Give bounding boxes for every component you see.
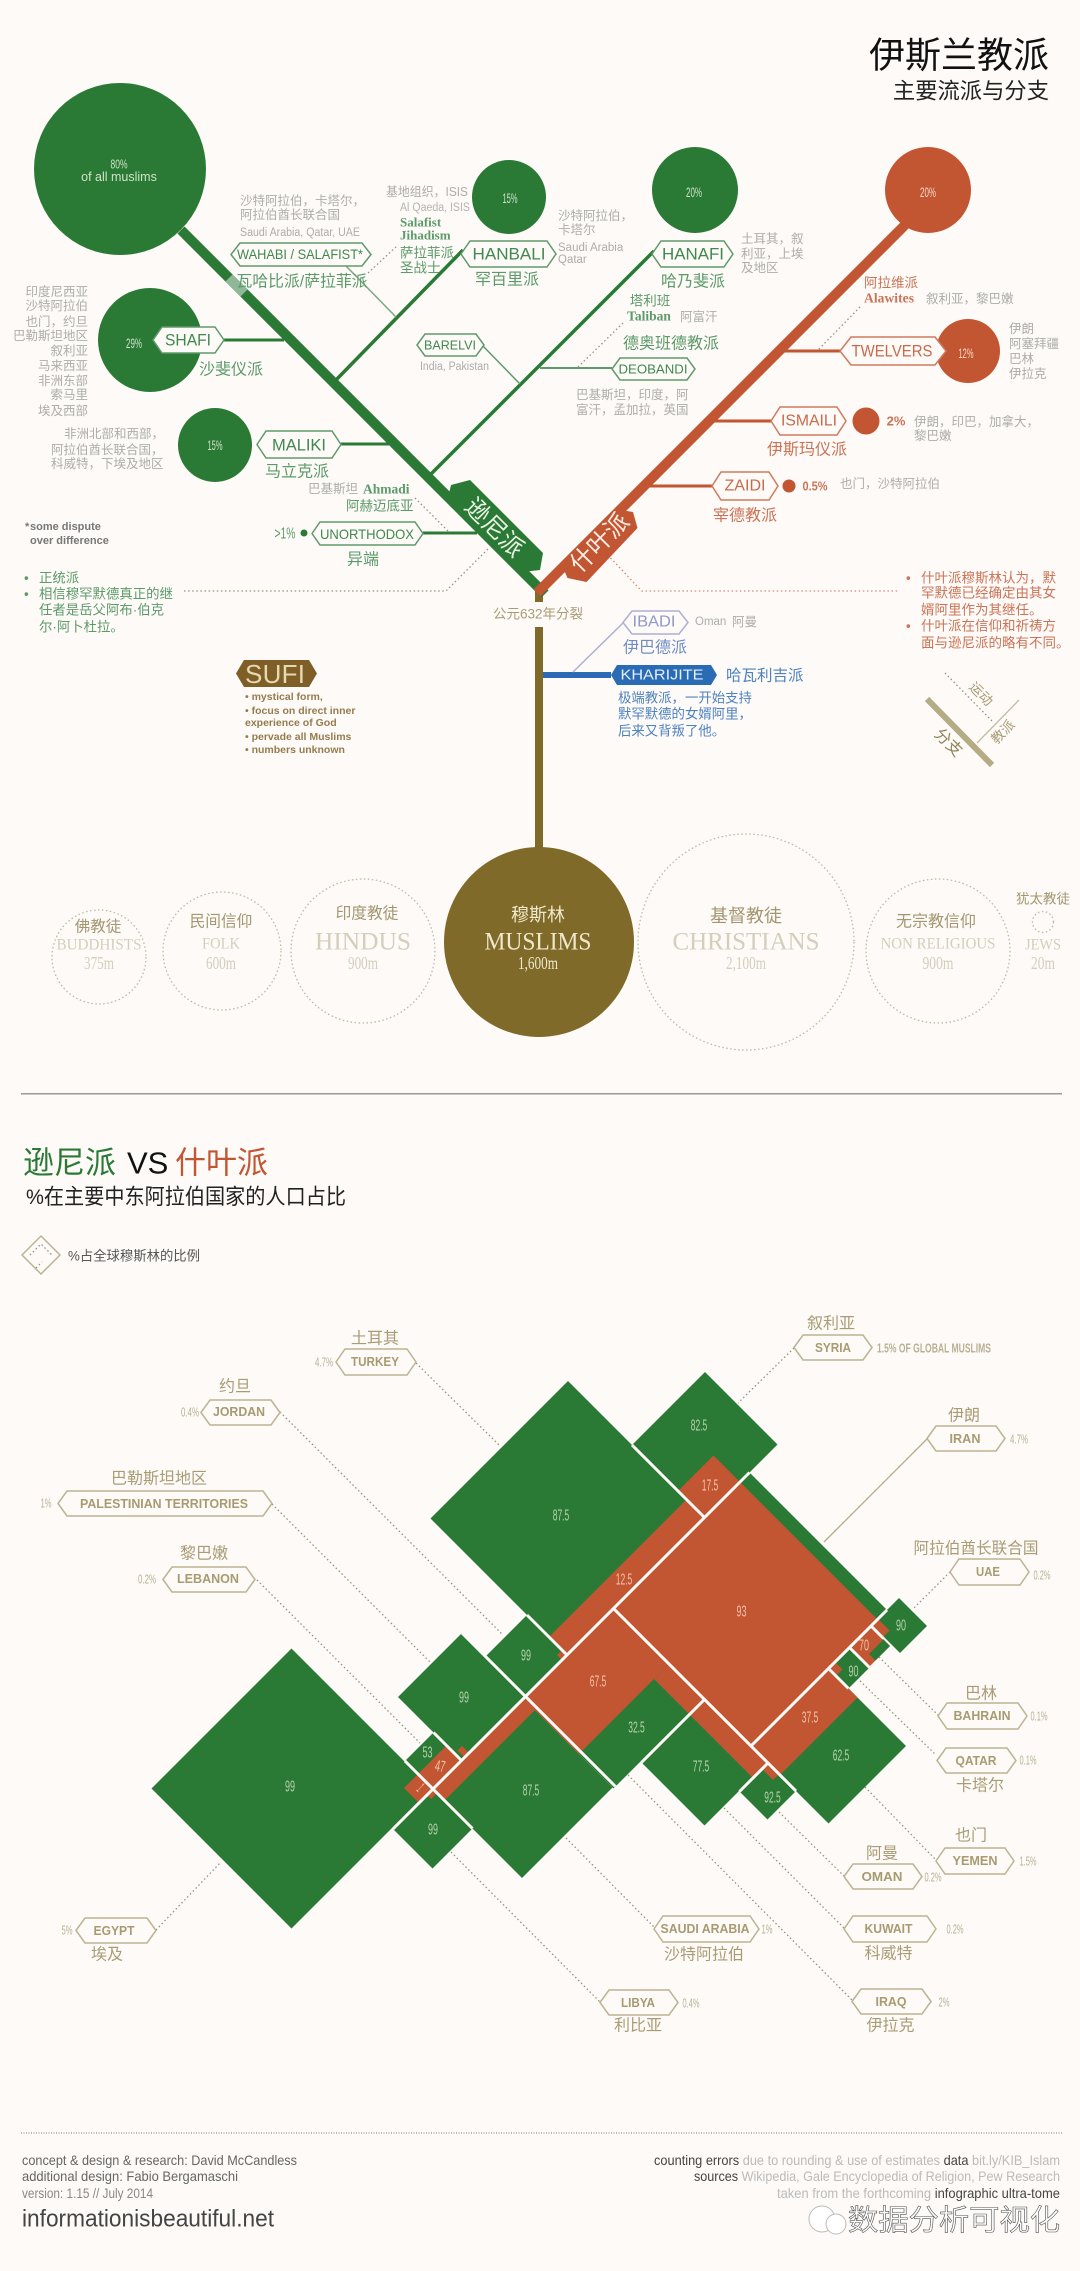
- branch: Taliban and Deobandi: 巴基斯坦，印度，阿: [576, 387, 689, 402]
- branch: Ismaili: ISMAILI: [781, 412, 837, 430]
- diamond: Libya: [393, 1789, 472, 1868]
- footer: credits: additional design: Fabio Bergamaschi: [22, 2168, 238, 2184]
- branch: Barelvi: BARELVI: [424, 338, 476, 352]
- country label: Iraq: IRAQ: [876, 1995, 907, 2009]
- branch: Hanafi: 哈乃斐派: [661, 272, 725, 290]
- branch: Twelvers: 巴林: [1009, 352, 1034, 366]
- branch: Kharijite: KHARIJITE: [620, 666, 704, 684]
- country label: Libya: 利比亚: [614, 2016, 662, 2034]
- religion circle: Buddhists: [52, 910, 146, 1004]
- footer: credits: informationisbeautiful.net: [22, 2206, 274, 2232]
- country label: Turkey: [315, 1330, 416, 1375]
- religion circle: Jews: [1016, 892, 1070, 973]
- country label: Qatar: 卡塔尔: [956, 1776, 1004, 1794]
- chart values: 1: [413, 1781, 427, 1795]
- religion circle: Hindus: 900m: [348, 953, 378, 973]
- country label: Turkey: 土耳其: [351, 1330, 399, 1348]
- legend: share of global Muslims: [22, 1236, 200, 1274]
- chart values: 90: [896, 1618, 906, 1634]
- religion circle: Jews: 20m: [1031, 953, 1055, 973]
- text block: Sunni beliefs: 相信穆罕默德真正的继: [39, 586, 173, 602]
- panel: Sufi: • numbers unknown: [245, 744, 345, 756]
- country label: Iraq: 2%: [938, 1994, 950, 2010]
- religion circle: Non religious: [866, 879, 1010, 1023]
- chart values: 12.5: [616, 1572, 632, 1588]
- branch: Hanafi: [652, 147, 804, 290]
- diamond: Iraq: [524, 1608, 704, 1788]
- branch: Taliban and Deobandi: 富汗，孟加拉，英国: [576, 402, 689, 417]
- country label: Oman: 阿曼: [866, 1844, 898, 1862]
- footer: sources: [654, 2152, 1060, 2201]
- branch: Unorthodox and Ahmadi: >1%: [274, 526, 296, 542]
- branch: Ibadi: [623, 611, 757, 656]
- branch: Ibadi: 伊巴德派: [623, 638, 687, 656]
- religion circle: Jews: 犹太教徒: [1016, 892, 1070, 906]
- chart values: 87.5: [523, 1782, 539, 1800]
- religion circle: Buddhists: 375m: [84, 953, 114, 973]
- branch: Zaidi: [712, 472, 940, 524]
- branch: Ismaili: 2%: [887, 414, 906, 428]
- branch: Salafist Jihadism: Salafist: [400, 214, 442, 230]
- leader lines from country labels: [156, 1348, 950, 2002]
- footnote: [25, 521, 109, 547]
- branch: Ibadi: Oman: [695, 616, 726, 628]
- diamond: Turkey: [430, 1381, 704, 1655]
- chart values: [285, 1418, 906, 1838]
- country label: Kuwait: KUWAIT: [864, 1922, 913, 1936]
- country label: Jordan: 约旦: [219, 1378, 251, 1396]
- circle: all Sunni 80%: [34, 83, 206, 255]
- legend: share of global Muslims: %占全球穆斯林的比例: [68, 1248, 200, 1264]
- country label: Saudi Arabia: SAUDI ARABIA: [660, 1922, 750, 1936]
- branch: Wahabi / Salafist: 沙特阿拉伯，卡塔尔，: [240, 193, 365, 208]
- panel: Sufi: [236, 659, 355, 756]
- country label: Turkey: 4.7%: [315, 1354, 333, 1370]
- country label: Lebanon: 黎巴嫩: [180, 1544, 228, 1562]
- country label: Saudi Arabia: [654, 1916, 773, 1964]
- religion circle: Christians: [638, 834, 854, 1050]
- diamond: Lebanon: [398, 1633, 526, 1760]
- country label: Libya: 0.4%: [682, 1996, 700, 2010]
- chart values: 87.5: [553, 1508, 569, 1524]
- branch: Salafist Jihadism: 萨拉菲派: [400, 246, 454, 260]
- chart values: 99: [459, 1690, 469, 1706]
- country label: Bahrain: 0.1%: [1030, 1708, 1048, 1724]
- country label: Egypt: EGYPT: [94, 1924, 135, 1938]
- badge: Sunni: 逊尼派: [459, 493, 529, 563]
- country label: Saudi Arabia: 1%: [762, 1922, 773, 1936]
- branch: Hanbali: HANBALI: [472, 244, 546, 264]
- country label: Iran: 4.7%: [1010, 1432, 1028, 1446]
- branch: Shafi: 埃及西部: [38, 403, 88, 418]
- branch: Twelvers: 伊拉克: [1009, 366, 1047, 381]
- legend: branch, sect, movement key: [927, 673, 1019, 765]
- branch: Wahabi / Salafist: WAHABI / SALAFIST*: [237, 246, 363, 262]
- branch: Hanafi: 利亚，上埃: [741, 247, 804, 261]
- text block: Sunni beliefs: •: [24, 570, 29, 586]
- diamond: Saudi Arabia: [433, 1698, 612, 1878]
- diamond: Syria: [632, 1372, 778, 1518]
- panel: Sufi: SUFI: [245, 659, 305, 689]
- title: 伊斯兰教派: [869, 34, 1049, 76]
- religion circle: Hindus: HINDUS: [315, 928, 411, 956]
- chart values: 93: [736, 1604, 747, 1620]
- text block: Shia beliefs: 婿阿里作为其继任。: [921, 602, 1042, 618]
- branch: Ismaili: 伊朗，印巴，加拿大，: [914, 414, 1039, 429]
- branch: Twelvers: TWELVERS: [852, 342, 932, 360]
- religion circle: Hindus: [291, 879, 435, 1023]
- title: [869, 34, 1049, 104]
- country label: Palestinian territories: 巴勒斯坦地区: [111, 1470, 207, 1488]
- branch: Unorthodox and Ahmadi: Ahmadi: [363, 482, 410, 496]
- legend: branch, sect, movement key: 运动: [966, 679, 996, 709]
- text block: Sunni beliefs: 尔·阿卜杜拉。: [39, 620, 124, 634]
- diamond: Iran: [614, 1472, 886, 1745]
- branch: Hanbali: 卡塔尔: [558, 222, 596, 237]
- branch: Maliki: 马立克派: [265, 462, 329, 480]
- branch: Salafist Jihadism: [386, 185, 470, 276]
- branch: Hanbali: Saudi Arabia: [558, 242, 624, 254]
- branch: Salafist Jihadism: Jihadism: [400, 228, 451, 242]
- sect tree: trunk and main branches: [181, 225, 905, 850]
- diamond: Egypt: [152, 1648, 432, 1929]
- badge: Sunni: [448, 480, 543, 572]
- religion circle: Muslims: MUSLIMS: [484, 928, 592, 956]
- branch: Barelvi: [417, 334, 489, 373]
- country label: Iran: IRAN: [950, 1432, 980, 1446]
- legend: branch, sect, movement key: 分支: [931, 725, 966, 760]
- branch: Taliban and Deobandi: Taliban: [627, 308, 671, 324]
- country label: Iran: [927, 1406, 1028, 1451]
- panel: Sufi: • pervade all Muslims: [245, 731, 352, 743]
- religion circle: Christians: 2,100m: [726, 953, 766, 973]
- country label: UAE: 阿拉伯酋长联合国: [914, 1540, 1038, 1558]
- circle and branch: Shia 20%: [885, 147, 971, 233]
- religion circle: Non religious: NON RELIGIOUS: [880, 936, 996, 952]
- diamond: Kuwait: [642, 1700, 767, 1826]
- legend: branch, sect, movement key: 教派: [988, 717, 1018, 747]
- branch: Kharijite: 极端教派，一开始支持: [618, 690, 752, 706]
- country label: Turkey: TURKEY: [351, 1355, 400, 1369]
- country label: Syria: SYRIA: [815, 1341, 851, 1355]
- chart values: 99: [285, 1778, 295, 1796]
- circle and branch: Shia 20%: 20%: [920, 184, 936, 200]
- country label: Qatar: 0.1%: [1020, 1752, 1037, 1768]
- religion circle: Muslims: [444, 847, 634, 1037]
- branch: Ismaili: 伊斯玛仪派: [767, 440, 847, 458]
- country label: Iraq: 伊拉克: [866, 2016, 915, 2034]
- country label: Qatar: [937, 1748, 1037, 1794]
- branch: Hanafi: 20%: [686, 184, 702, 200]
- country label: Qatar: QATAR: [956, 1754, 996, 1768]
- branch: Salafist Jihadism: 基地组织，ISIS: [386, 185, 468, 199]
- country label: Jordan: JORDAN: [213, 1405, 265, 1419]
- branch: Ismaili: [767, 407, 1039, 458]
- diamond: Qatar: [830, 1648, 870, 1688]
- branch: Hanafi: HANAFI: [662, 244, 724, 264]
- chart values: 17.5: [702, 1478, 718, 1494]
- religion circle: Non religious: 900m: [922, 953, 954, 973]
- branch: Shafi: 沙斐仪派: [199, 360, 263, 378]
- label: split in 632 AD: 公元632年分裂: [493, 606, 583, 622]
- footer: sources: counting errors due to rounding & use of estimates data bit.ly/KIB_Islam: [654, 2152, 1060, 2168]
- country label: Syria: 叙利亚: [807, 1314, 855, 1332]
- country label: Oman: [844, 1844, 942, 1889]
- branch: Hanafi: 土耳其，叙: [741, 232, 804, 246]
- watermark: 数据分析可视化: [848, 2204, 1060, 2237]
- country label: Libya: LIBYA: [621, 1996, 655, 2010]
- religion circle: Folk: 民间信仰: [190, 912, 252, 930]
- country label: Lebanon: 0.2%: [138, 1572, 156, 1586]
- heading: Sunni vs Shia: %在主要中东阿拉伯国家的人口占比: [26, 1185, 346, 1209]
- branch: Shafi: 巴勒斯坦地区: [13, 329, 88, 343]
- country label: Oman: 0.2%: [924, 1870, 942, 1884]
- branch: Ibadi: IBADI: [632, 614, 676, 630]
- text block: Shia beliefs: 罕默德已经确定由其女: [921, 584, 1056, 600]
- text block: Shia beliefs: [906, 570, 1070, 650]
- branch: Ismaili: 黎巴嫩: [914, 429, 952, 443]
- chart values: 62.5: [833, 1748, 849, 1764]
- footer: sources: taken from the forthcoming infographic ultra-tome: [777, 2185, 1060, 2201]
- religion circle: Non religious: 无宗教信仰: [896, 912, 976, 930]
- panel: Sufi: experience of God: [245, 717, 337, 729]
- branch: Unorthodox and Ahmadi: 阿赫迈底亚: [346, 498, 414, 514]
- country label: UAE: 0.2%: [1034, 1568, 1051, 1582]
- branch: Shafi: 马来西亚: [38, 359, 88, 373]
- branch: Taliban and Deobandi: DEOBANDI: [618, 362, 688, 376]
- religion circle: Jews: JEWS: [1025, 936, 1061, 954]
- branch: Taliban and Deobandi: 阿富汗: [680, 309, 718, 324]
- branch: Twelvers: 12%: [958, 345, 974, 361]
- footer: credits: concept & design & research: David McCandless: [22, 2152, 297, 2168]
- branch: Shafi: SHAFI: [165, 330, 211, 350]
- branch: Kharijite: 哈瓦利吉派: [726, 666, 804, 684]
- text block: Shia beliefs: 什叶派在信仰和祈祷方: [921, 618, 1056, 634]
- panel: Sufi: • mystical form,: [245, 691, 323, 703]
- branch: Maliki: 非洲北部和西部，: [64, 426, 164, 441]
- country label: Bahrain: [938, 1684, 1048, 1729]
- branch: Alawites: [864, 276, 1014, 306]
- branch: Salafist Jihadism: 圣战士: [400, 260, 440, 276]
- religion circle: Muslims: 1,600m: [518, 953, 558, 973]
- footnote: over difference: [30, 535, 109, 547]
- country label: Jordan: 0.4%: [181, 1404, 199, 1420]
- branch: Hanbali: Qatar: [558, 254, 587, 266]
- diamond: Oman: [740, 1764, 795, 1820]
- chart values: 70: [859, 1638, 869, 1654]
- religion circle: Christians: CHRISTIANS: [672, 928, 820, 956]
- branch: Shafi: 索马里: [50, 388, 88, 402]
- religion circle: Muslims: 穆斯林: [511, 905, 565, 925]
- branch: Taliban and Deobandi: 德奥班德教派: [623, 334, 719, 352]
- branch: Unorthodox and Ahmadi: 巴基斯坦: [308, 482, 358, 496]
- branch: Unorthodox and Ahmadi: [274, 482, 423, 568]
- branch: Zaidi: 也门，沙特阿拉伯: [840, 476, 940, 491]
- country label: Palestinian territories: PALESTINIAN TERRITORIES: [80, 1497, 248, 1511]
- text block: Shia beliefs: 什叶派穆斯林认为，默: [921, 570, 1056, 586]
- country label: Libya: [600, 1990, 700, 2034]
- branch: Taliban and Deobandi: 塔利班: [630, 294, 670, 308]
- country label: Yemen: 1.5%: [1020, 1854, 1037, 1868]
- branch: Hanafi: 及地区: [741, 261, 779, 275]
- text block: Sunni beliefs: 任者是岳父阿布·伯克: [39, 602, 164, 618]
- branch: Ibadi: 阿曼: [732, 615, 757, 629]
- circle: all Sunni 80%: of all muslims: [81, 170, 157, 184]
- branch: Shafi: 沙特阿拉伯: [25, 298, 88, 313]
- country label: Bahrain: 巴林: [965, 1684, 997, 1702]
- branch: Salafist Jihadism: Al Qaeda, ISIS: [400, 202, 470, 214]
- chart values: 77.5: [693, 1758, 709, 1776]
- chart: country diamonds, Sunni vs Shia share: [152, 1304, 992, 2144]
- country label: Palestinian territories: 1%: [40, 1496, 52, 1510]
- branch: Shafi: 29%: [126, 335, 142, 351]
- chart values: 53: [422, 1744, 433, 1762]
- text block: Shia beliefs: 面与逊尼派的略有不同。: [921, 636, 1070, 650]
- text block: Shia beliefs: •: [906, 618, 911, 634]
- country label: Oman: OMAN: [862, 1870, 902, 1884]
- country label: Iraq: [852, 1989, 950, 2034]
- branch: Maliki: [51, 408, 341, 482]
- country label: Jordan: [181, 1378, 280, 1425]
- branch: Wahabi / Salafist: 瓦哈比派/萨拉菲派: [236, 272, 368, 290]
- branch: Zaidi: 0.5%: [802, 478, 828, 494]
- branch: Twelvers: [840, 319, 1059, 383]
- religion circle: Folk: [163, 892, 281, 1010]
- country label: Lebanon: [138, 1544, 255, 1592]
- religion circle: Christians: 基督教徒: [710, 906, 782, 926]
- branch: Twelvers: 伊朗: [1009, 322, 1034, 336]
- country label: Syria: 1.5% OF GLOBAL MUSLIMS: [877, 1340, 991, 1356]
- branch: Hanbali: 沙特阿拉伯，: [558, 208, 633, 223]
- text block: Shia beliefs: •: [906, 570, 911, 586]
- heading: Sunni vs Shia: 逊尼派: [23, 1146, 116, 1180]
- branch: Alawites: Alawites: [864, 290, 914, 306]
- country label: Egypt: [62, 1918, 156, 1964]
- country label: Kuwait: 0.2%: [946, 1922, 964, 1936]
- branch: Shafi: 叙利亚: [50, 344, 88, 358]
- country label: Syria: [794, 1314, 991, 1360]
- heading: Sunni vs Shia: VS: [127, 1146, 168, 1180]
- religion circle: Hindus: 印度教徒: [336, 904, 399, 922]
- branch: Kharijite: 默罕默德的女婿阿里，: [618, 706, 752, 722]
- diamond: Yemen: [751, 1668, 906, 1824]
- text block: Sunni beliefs: [24, 570, 173, 634]
- country label: Saudi Arabia: 沙特阿拉伯: [664, 1946, 744, 1964]
- country label: Palestinian territories: [40, 1470, 272, 1516]
- branch: Kharijite: 后来又背叛了他。: [618, 724, 725, 738]
- branch: Unorthodox and Ahmadi: 异端: [347, 550, 379, 568]
- country label: Kuwait: [844, 1916, 964, 1962]
- branch: Zaidi: 宰德教派: [713, 506, 777, 524]
- country label: Bahrain: BAHRAIN: [954, 1709, 1010, 1723]
- branch: Taliban and Deobandi: [576, 294, 719, 417]
- branch: Alawites: 阿拉维派: [864, 276, 918, 290]
- branch: Twelvers: 阿塞拜疆: [1009, 336, 1059, 351]
- text block: Sunni beliefs: 正统派: [39, 570, 79, 586]
- chart values: 67.5: [590, 1674, 606, 1690]
- country label: Yemen: [936, 1826, 1037, 1874]
- chart values: 99: [521, 1648, 531, 1664]
- country label: Kuwait: 科威特: [864, 1944, 913, 1962]
- country label: Iran: 伊朗: [948, 1406, 980, 1424]
- country label: Yemen: YEMEN: [952, 1854, 998, 1868]
- branch: Wahabi / Salafist: [231, 193, 371, 290]
- panel: Sufi: • focus on direct inner: [245, 705, 355, 717]
- branch: Maliki: 阿拉伯酋长联合国，: [51, 442, 164, 457]
- branch: Kharijite: [611, 665, 804, 738]
- footnote: *: [25, 521, 30, 533]
- chart values: 99: [428, 1822, 438, 1838]
- religion circle: Buddhists: BUDDHISTS: [56, 936, 142, 954]
- branch: Hanbali: [461, 160, 633, 288]
- branch: Hanbali: 罕百里派: [475, 270, 539, 288]
- diamond: Palestinian territories: [406, 1732, 462, 1788]
- chart values: 90: [848, 1664, 859, 1680]
- country label: UAE: UAE: [976, 1565, 1000, 1579]
- branch: Maliki: 科威特，下埃及地区: [51, 456, 164, 471]
- title: 主要流派与分支: [893, 78, 1049, 104]
- footer: credits: [22, 2152, 297, 2232]
- religion circle: Buddhists: 佛教徒: [75, 918, 122, 936]
- branch: Unorthodox and Ahmadi: UNORTHODOX: [320, 526, 415, 542]
- country label: Lebanon: LEBANON: [177, 1572, 239, 1586]
- chart values: 92.5: [764, 1790, 781, 1806]
- branch: Barelvi: India, Pakistan: [420, 361, 489, 373]
- religion circle: Folk: 600m: [206, 953, 236, 973]
- circle: all Sunni 80%: 80%: [110, 156, 128, 172]
- branch: Alawites: 叙利亚，黎巴嫩: [926, 292, 1014, 306]
- heading: Sunni vs Shia: [23, 1146, 346, 1209]
- branch: Shafi: 也门，约旦: [25, 314, 88, 329]
- country label: UAE: [914, 1540, 1051, 1585]
- branch: Maliki: 15%: [208, 437, 222, 453]
- chart values: 82.5: [691, 1418, 707, 1434]
- country label: Egypt: 埃及: [91, 1946, 123, 1964]
- diamond: Bahrain: [850, 1628, 890, 1667]
- branch: Shafi: 非洲东部: [38, 373, 88, 388]
- footnote: some dispute: [30, 521, 101, 533]
- chart values: 37.5: [802, 1710, 818, 1726]
- footer: credits: version: 1.15 // July 2014: [22, 2185, 153, 2201]
- diamond: Jordan: [486, 1615, 567, 1696]
- branch: Hanbali: 15%: [502, 190, 518, 206]
- diamond: UAE: [872, 1598, 927, 1653]
- text block: Sunni beliefs: •: [24, 586, 29, 602]
- country label: Yemen: 也门: [955, 1826, 987, 1844]
- branch: Shafi: 印度尼西亚: [25, 284, 88, 299]
- heading: Sunni vs Shia: 什叶派: [175, 1146, 268, 1180]
- branch: Zaidi: ZAIDI: [724, 478, 766, 494]
- chart values: 32.5: [628, 1720, 645, 1736]
- country label: Egypt: 5%: [62, 1922, 73, 1938]
- branch: Maliki: MALIKI: [272, 436, 326, 454]
- chart values: 47: [434, 1758, 446, 1776]
- branch: Shafi: [13, 284, 263, 418]
- branch: Wahabi / Salafist: Saudi Arabia, Qatar, UAE: [240, 227, 360, 239]
- religion circle: Folk: FOLK: [202, 936, 240, 952]
- badge: Shia: 什叶派: [565, 508, 635, 578]
- branch: Wahabi / Salafist: 阿拉伯酋长联合国: [240, 207, 340, 222]
